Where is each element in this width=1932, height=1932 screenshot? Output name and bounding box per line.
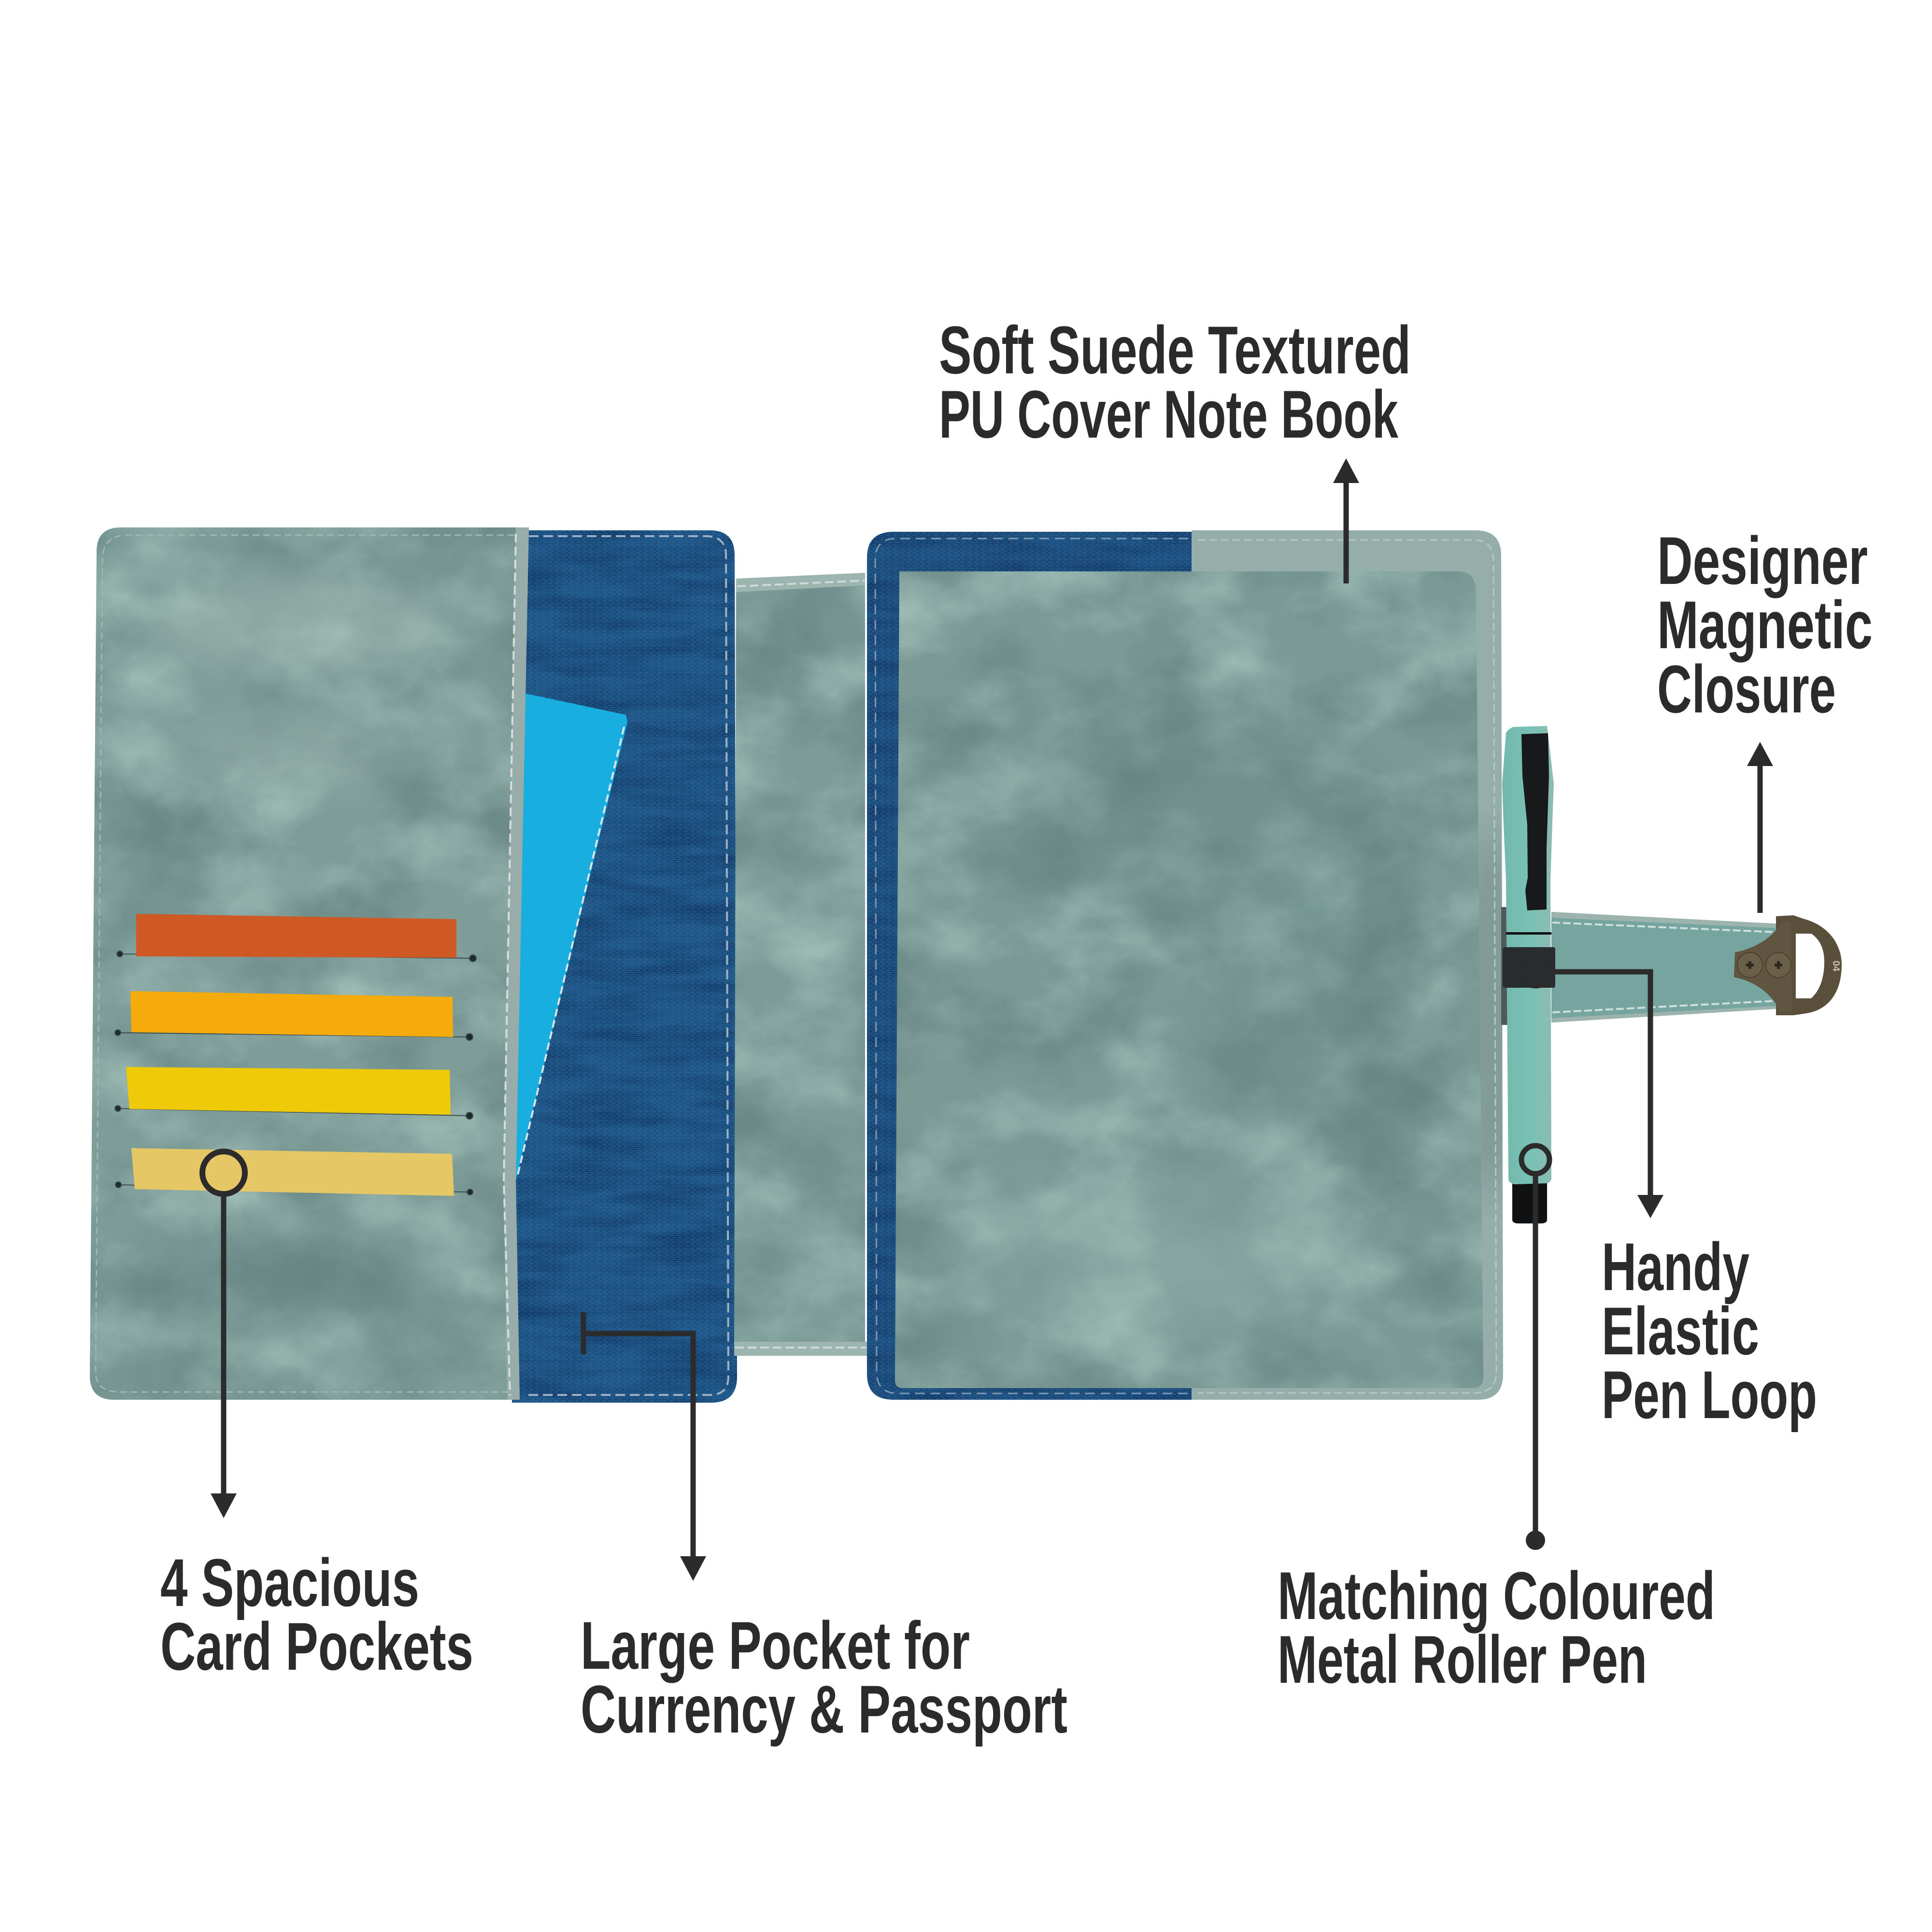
- callout: soft suede cover: [1333, 458, 1359, 583]
- callout: card pockets: [202, 1151, 245, 1518]
- label: designer closure: Closure: [1657, 651, 1836, 727]
- label: matching pen: [1278, 1558, 1715, 1697]
- label: card pockets: 4 Spacious: [160, 1545, 419, 1620]
- icon: screws: [1737, 952, 1791, 978]
- label: card pockets: [160, 1545, 473, 1684]
- label: soft suede: PU Cover Note Book: [939, 376, 1398, 452]
- pen clip: [1521, 733, 1549, 910]
- strap with magnetic closure: [1501, 907, 1842, 1025]
- label: large pocket: Currency & Passport: [581, 1671, 1067, 1747]
- icon: roller pen: [1502, 726, 1555, 1223]
- callout: matching pen: [1521, 1146, 1549, 1550]
- label: handy loop: Pen Loop: [1602, 1357, 1817, 1433]
- label: soft suede: Soft Suede Textured: [939, 312, 1411, 388]
- card: pale yellow: [131, 1148, 454, 1196]
- panel: notebook cover: [894, 570, 1485, 1391]
- strap: [1551, 912, 1782, 1023]
- pen tip: [1512, 1181, 1547, 1223]
- card: amber: [130, 991, 453, 1037]
- card pockets: [115, 914, 476, 1196]
- icon: D ring: [1776, 915, 1842, 1015]
- callout: handy elastic pen loop: [1522, 958, 1663, 1218]
- icon: cyan passport: [507, 691, 627, 1180]
- panel: right cover leather: [1192, 530, 1507, 1400]
- pen body: [1502, 726, 1554, 1184]
- icon: metal plate: [1734, 922, 1792, 1012]
- label: large pocket: [581, 1607, 1067, 1747]
- elastic loop: [1503, 947, 1555, 988]
- panel: left pocket blue lining: [502, 526, 744, 1406]
- pocket slits: [115, 951, 476, 1195]
- engraved mark: 04: [1831, 961, 1841, 972]
- pen ring: [1506, 932, 1551, 935]
- panel: right cover blue: [865, 529, 1198, 1403]
- card: yellow: [126, 1067, 451, 1115]
- label: handy loop: Handy: [1602, 1229, 1749, 1305]
- card: orange: [136, 914, 456, 958]
- panel: left leather card panel: [87, 524, 531, 1403]
- callout: designer closure: [1747, 742, 1773, 913]
- label: matching pen: Matching Coloured: [1278, 1558, 1715, 1634]
- label: card pockets: Card Pockets: [160, 1608, 473, 1684]
- label: designer closure: [1657, 523, 1873, 727]
- label: handy loop: Elastic: [1602, 1293, 1759, 1369]
- stitched pocket edge of passport: [518, 727, 624, 1175]
- label: matching pen: Metal Roller Pen: [1278, 1621, 1647, 1697]
- panel: spine: [732, 570, 867, 1357]
- label: handy loop: [1602, 1229, 1817, 1433]
- label: soft suede: [939, 312, 1411, 452]
- label: large pocket: Large Pocket for: [581, 1607, 970, 1683]
- callout: large pocket: [583, 1312, 706, 1581]
